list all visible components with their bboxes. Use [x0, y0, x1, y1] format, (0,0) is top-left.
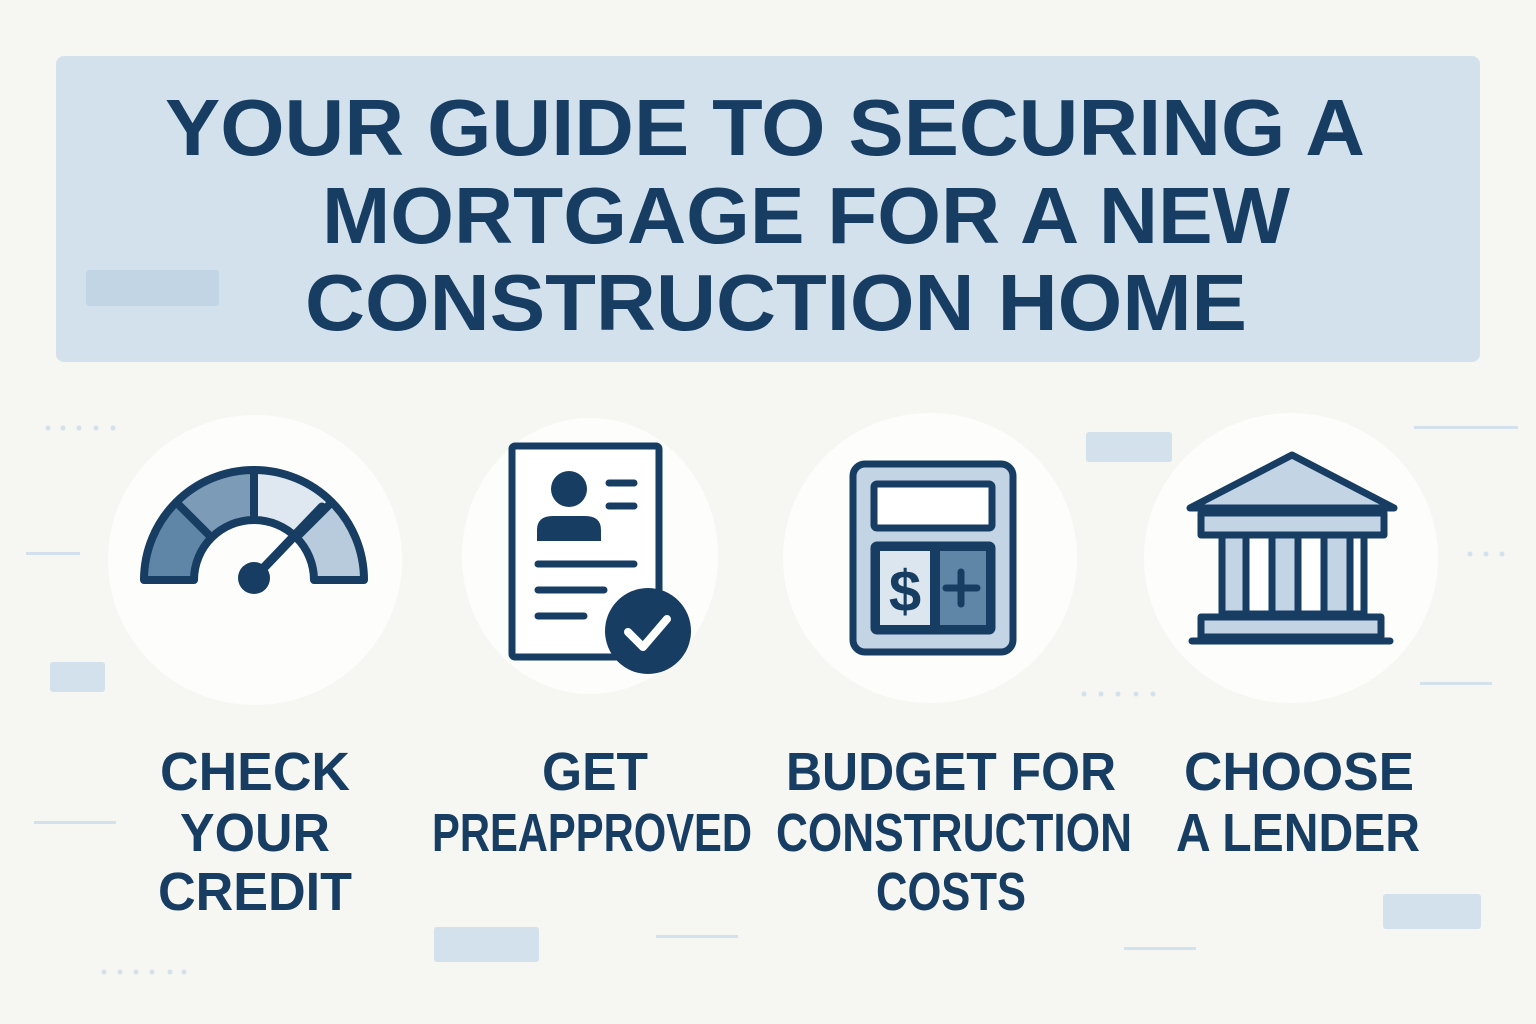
title banner: YOUR GUIDE TO SECURING A	[165, 83, 1365, 172]
label: budget for construction costs: BUDGET FOR	[786, 742, 1116, 802]
icon: credit gauge	[144, 470, 364, 594]
icon: calculator: $	[889, 559, 921, 624]
decorative shapes	[26, 270, 1518, 974]
icon: bank	[1190, 455, 1394, 641]
icon: calculator	[853, 464, 1013, 652]
label: check your credit: CHECK	[160, 742, 350, 802]
label: budget for construction costs: COSTS	[876, 862, 1026, 922]
label: budget for construction costs	[776, 742, 1132, 922]
icon: preapproval document	[512, 446, 691, 674]
label: get preapproved	[432, 742, 752, 863]
label: check your credit	[158, 742, 352, 922]
label: check your credit: CREDIT	[158, 862, 352, 922]
icon circles	[108, 413, 1438, 705]
label: choose a lender: A LENDER	[1176, 803, 1420, 863]
label: check your credit: YOUR	[180, 803, 330, 863]
label: choose a lender	[1176, 742, 1420, 863]
title banner	[56, 56, 1480, 362]
label: get preapproved: PREAPPROVED	[432, 803, 752, 863]
label: choose a lender: CHOOSE	[1184, 742, 1414, 802]
title banner: CONSTRUCTION HOME	[305, 258, 1247, 347]
label: get preapproved: GET	[542, 742, 648, 802]
label: budget for construction costs: CONSTRUCTION	[776, 803, 1132, 863]
title banner: MORTGAGE FOR A NEW	[322, 171, 1290, 260]
